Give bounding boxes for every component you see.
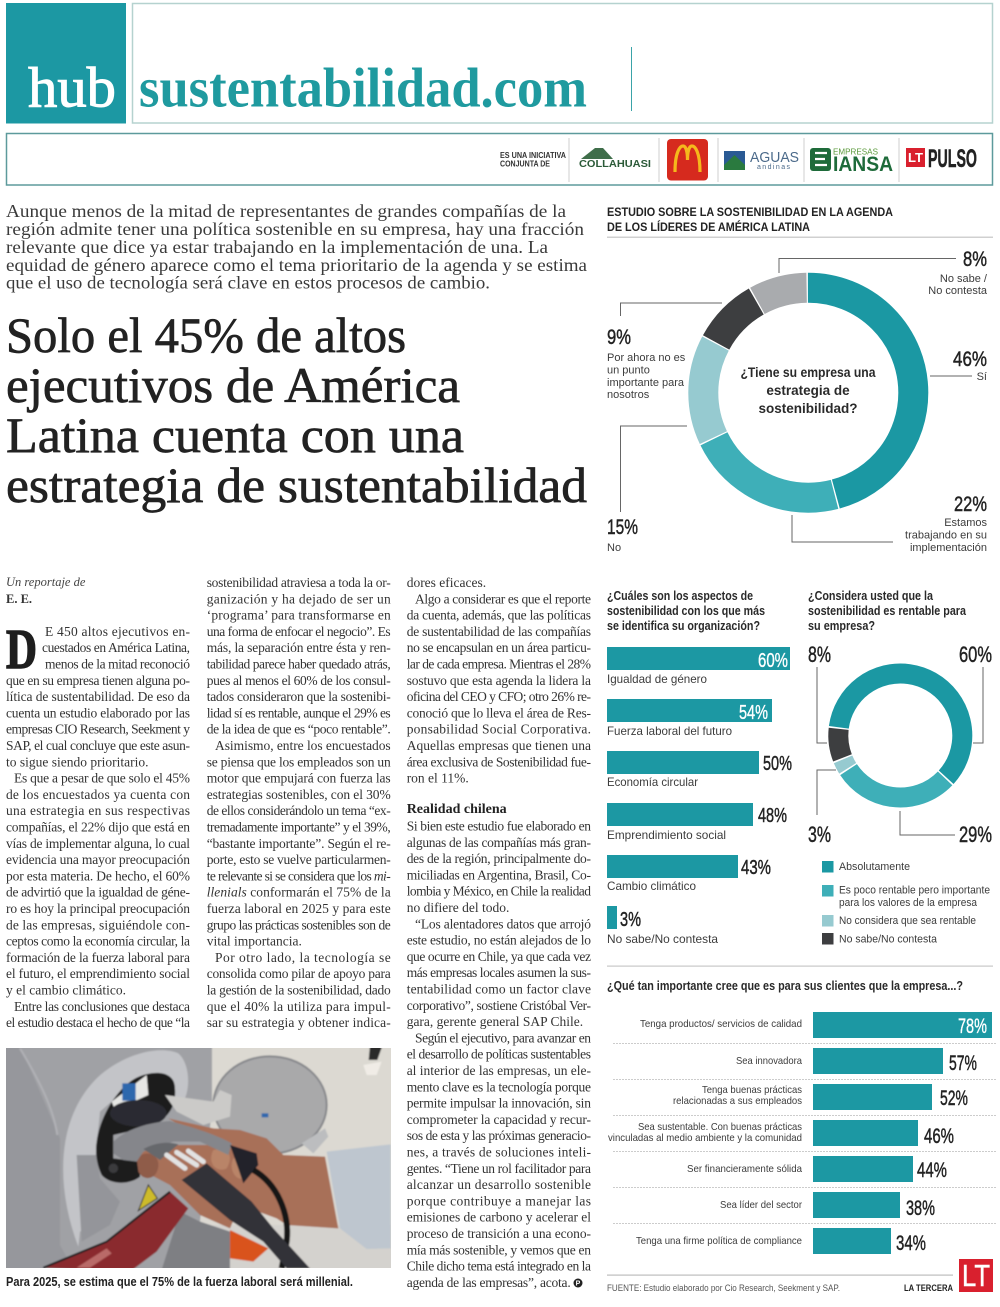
logo: Collahuasi bbox=[579, 148, 651, 170]
legend bbox=[822, 861, 990, 946]
article column 3: conoció que lo lleva el área de Res- bbox=[407, 705, 592, 720]
legend: Es poco rentable pero importante bbox=[839, 884, 990, 896]
hub logo block bbox=[6, 3, 126, 124]
byline: Un reportaje de bbox=[6, 575, 86, 589]
article column 2: lidad sí es rentable, aunque el 29% es bbox=[207, 705, 391, 720]
article column 1: el estudio destaca el hecho de que “la bbox=[6, 1015, 190, 1030]
article column 2: motor que empujará con fuerza las bbox=[207, 771, 391, 786]
bar: No sabe: No sabe/No contesta bbox=[607, 932, 718, 946]
article column 2: ganización y ha dejado de ser un bbox=[207, 591, 391, 606]
site name box: sustentabilidad.com bbox=[139, 58, 587, 120]
article column 2: Por otro lado, la tecnología se bbox=[215, 950, 391, 965]
article column 1: cuenta un estudio elaborado por las bbox=[6, 705, 190, 720]
article column 3 bbox=[407, 575, 592, 1290]
label 8%: 8% bbox=[963, 248, 987, 271]
row 57%: Sea innovadora bbox=[736, 1055, 802, 1067]
question: se identifica su organización? bbox=[607, 619, 760, 633]
donut question: sostenibilidad? bbox=[758, 401, 858, 416]
question bbox=[607, 589, 765, 633]
article column 2 bbox=[207, 575, 391, 1030]
article column 3: gentes. “Tiene un rol facilitador para bbox=[407, 1161, 591, 1176]
bar: Emprendimiento social bbox=[607, 803, 787, 842]
label 22%: 22% bbox=[954, 493, 987, 516]
headline: Solo el 45% de altos bbox=[6, 307, 406, 363]
article column 3: sostuvo que esta agenda la lidera la bbox=[407, 673, 591, 688]
article column 3: proceso de transición a una econo- bbox=[407, 1226, 592, 1241]
photo: electric car charging bbox=[0, 1045, 400, 1275]
article column 3: comprometer la capacidad y recur- bbox=[407, 1112, 592, 1127]
label 3%: 3% bbox=[808, 822, 831, 847]
article column 3: ron el 11%. bbox=[407, 771, 469, 786]
label 46%: 46% bbox=[953, 348, 987, 371]
article column 3: emisiones de carbono y acelerar el bbox=[407, 1210, 591, 1225]
La Tercera logo: LT bbox=[962, 1258, 990, 1293]
label 46% bbox=[930, 348, 987, 383]
article column 3: gara, gerente general SAP Chile. bbox=[407, 1014, 583, 1029]
article column 3: Chile dicho tema está integrado en la bbox=[407, 1259, 591, 1274]
article column 2: grupo las prácticas sostenibles son de bbox=[207, 917, 391, 932]
donut question: estrategia de bbox=[766, 383, 850, 398]
byline: E. E. bbox=[6, 592, 32, 606]
row 34% bbox=[636, 1228, 926, 1255]
article column 1: compañías, el 22% dijo que está en bbox=[6, 820, 190, 834]
article column 2: una forma de enfocar el negocio”. Es bbox=[207, 624, 391, 639]
label 22%: Estamos bbox=[944, 517, 987, 529]
bar: Igualdad de género: Igualdad de género bbox=[607, 672, 707, 686]
label 22%: implementación bbox=[910, 542, 987, 554]
row 44%: 44% bbox=[917, 1159, 947, 1182]
article column 3: porque contribuye a manejar las bbox=[407, 1193, 591, 1208]
photo caption: Para 2025, se estima que el 75% de la fuerza laboral será millenial. bbox=[6, 1275, 353, 1289]
bar: Cambio climático bbox=[607, 855, 771, 893]
row 34%: Tenga una firme política de compliance bbox=[636, 1235, 802, 1247]
donut question: ¿Tiene su empresa una bbox=[740, 365, 876, 380]
bar: Economía circular bbox=[607, 751, 792, 789]
label 22% bbox=[792, 493, 987, 554]
intro paragraph: que el uso de tecnología será clave en estos procesos de cambio. bbox=[6, 272, 490, 292]
bar: Cambio climático: Cambio climático bbox=[607, 879, 696, 893]
row 38%: Sea líder del sector bbox=[720, 1199, 802, 1211]
logo: Aguas Andinas: andinas bbox=[757, 164, 790, 171]
article column 3: mía más sostenible, y vemos que en bbox=[407, 1242, 591, 1257]
bar: Emprendimiento social: Emprendimiento social bbox=[607, 828, 726, 842]
row 78%: 78% bbox=[958, 1015, 987, 1038]
headline: estrategia de sustentabilidad bbox=[6, 457, 587, 513]
article column 2: tados consideraron que la sostenibi- bbox=[207, 689, 391, 704]
label 15%: No bbox=[607, 542, 621, 554]
sponsors strip: ES UNA INICIATIVA bbox=[500, 151, 566, 160]
bar chart: client importance bbox=[607, 979, 997, 1255]
article column 3: este estudio, no están alejados de lo bbox=[407, 933, 591, 948]
article column 1 bbox=[6, 624, 190, 1030]
legend: No considera que sea rentable bbox=[839, 915, 976, 927]
byline bbox=[6, 575, 86, 606]
article column 3: lar de cada empresa. Mientras el 28% bbox=[407, 656, 591, 672]
article column 1: lítica de sustentabilidad. De eso da bbox=[6, 689, 190, 704]
article column 2: estrategias sostenibles, con el 30% bbox=[207, 787, 391, 802]
masthead bbox=[6, 3, 992, 124]
source footer: LA TERCERA bbox=[904, 1283, 953, 1294]
label 15%: 15% bbox=[607, 516, 638, 539]
logo: McDonald's bbox=[667, 139, 708, 180]
article column 3: agenda de las empresas”, acota. bbox=[407, 1275, 571, 1290]
row 52%: Tenga buenas prácticas bbox=[702, 1084, 802, 1096]
label 8%: 8% bbox=[808, 642, 831, 667]
row 46%: vinculadas al medio ambiente y la comunidad bbox=[608, 1132, 802, 1144]
legend: Absolutamente bbox=[839, 861, 910, 873]
article column 3: miciliadas en Argentina, Brasil, Co- bbox=[407, 867, 592, 882]
article column 1: que en su empresa tienen alguna po- bbox=[6, 673, 190, 688]
article column 2: pues al menos el 60% de los consul- bbox=[207, 673, 391, 688]
bar: Emprendimiento social: 48% bbox=[758, 805, 787, 827]
bar: Igualdad de género bbox=[607, 647, 790, 686]
label 15% bbox=[607, 426, 687, 554]
bar: Igualdad de género: 60% bbox=[758, 650, 788, 672]
drop cap: D bbox=[6, 619, 37, 681]
article column 3: algunas de las compañías más gran- bbox=[407, 835, 592, 850]
label 8% bbox=[808, 642, 831, 743]
article column 3: mento clave es la tecnología porque bbox=[407, 1079, 591, 1094]
article column 3: Algo a considerar es que el reporte bbox=[415, 591, 591, 606]
chart heading: ESTUDIO SOBRE LA SOSTENIBILIDAD EN LA AGENDA bbox=[607, 207, 893, 219]
article column 2: que el 40% la utiliza para impul- bbox=[207, 999, 391, 1014]
article column 1: y el cambio climático. bbox=[6, 982, 126, 998]
label 9%: un punto bbox=[607, 364, 650, 376]
article column 2: ‘programa’ para transformarse en bbox=[207, 608, 391, 623]
article column 2: Asimismo, entre los encuestados bbox=[215, 738, 391, 753]
article column 2: consolida como pilar de apoyo para bbox=[207, 966, 391, 981]
article column 3: dores eficaces. bbox=[407, 575, 486, 590]
intro paragraph: región admite tener una política sostenible en su empresa, hay una fracción bbox=[6, 219, 584, 239]
article column 3: no difiere del todo. bbox=[407, 900, 509, 915]
article column 3: al interior de las empresas, un ele- bbox=[407, 1063, 592, 1078]
end mark: P bbox=[576, 1280, 581, 1288]
row 57% bbox=[736, 1048, 977, 1075]
logo: LT Pulso: LT bbox=[908, 150, 923, 165]
article column 3: “Los alentadores datos que arrojó bbox=[415, 916, 591, 931]
bar: Economía circular: 50% bbox=[763, 753, 792, 775]
article column 2: sostenibilidad atraviesa a toda la or- bbox=[207, 575, 391, 590]
article column 3: da cuenta, además, que las políticas bbox=[407, 608, 591, 623]
article column 3: Aquellas empresas que tienen una bbox=[407, 738, 591, 753]
question: sostenibilidad con los que más bbox=[607, 604, 765, 618]
site name box bbox=[132, 4, 992, 123]
article column 2: llenials conformarán el 75% de la bbox=[207, 885, 391, 900]
logo: LT Pulso bbox=[906, 145, 977, 173]
article column 3: ponsabilidad Social Corporativa. bbox=[407, 722, 591, 737]
article column 1: Entre las conclusiones que destaca bbox=[14, 999, 190, 1014]
row 44% bbox=[687, 1156, 947, 1182]
intro paragraph: relevante que dice ya estar trabajando en la implementación de una. La bbox=[6, 237, 548, 257]
row 38%: 38% bbox=[906, 1197, 935, 1220]
end mark bbox=[574, 1278, 582, 1288]
article column 3: lombia y México, en Chile la realidad bbox=[407, 884, 591, 899]
intro paragraph: Aunque menos de la mitad de representantes de grandes compañías de la bbox=[6, 201, 566, 221]
article column 2: porte, esto se vuelve particularmen- bbox=[207, 852, 391, 867]
article column 1: ro es hoy la principal preocupación bbox=[6, 901, 190, 916]
headline bbox=[6, 307, 587, 513]
row 78% bbox=[640, 1012, 992, 1038]
article column 1: una estrategia en sus respectivas bbox=[6, 803, 190, 818]
intro paragraph: equidad de género aparece como el tema prioritario de la agenda y se estima bbox=[6, 255, 587, 275]
article column 2: de la idea de que es “poco rentable”. bbox=[207, 722, 391, 737]
intro paragraph bbox=[6, 201, 587, 292]
article column 3: des de la región, principalmente do- bbox=[407, 851, 592, 866]
donut chart: profitability bbox=[808, 589, 992, 946]
row 57%: 57% bbox=[949, 1052, 977, 1075]
article column 1: por esta materia. De hecho, el 60% bbox=[6, 868, 190, 883]
bar: Economía circular: Economía circular bbox=[607, 775, 698, 789]
article column 1: Es que a pesar de que solo el 45% bbox=[14, 771, 190, 786]
article column 3: que ocurre en Chile, ya que cada vez bbox=[407, 949, 591, 964]
article column 1: cuestados en América Latina, bbox=[42, 640, 190, 655]
hub logo block: hub bbox=[28, 56, 116, 120]
article column 2: vital importancia. bbox=[207, 934, 302, 949]
chart heading: DE LOS LÍDERES DE AMÉRICA LATINA bbox=[607, 221, 810, 234]
article column 1: empresas CIO Research, Seekment y bbox=[6, 722, 190, 737]
article column 3: nes, a través de soluciones inteli- bbox=[407, 1144, 592, 1160]
logo: Empresas Iansa: IANSA bbox=[833, 153, 893, 176]
question bbox=[808, 589, 967, 633]
row 44%: Ser financieramente sólida bbox=[687, 1163, 802, 1175]
row 52%: 52% bbox=[940, 1087, 968, 1110]
label 8% bbox=[779, 248, 988, 297]
article column 2: tremadamente importante” y el 39%, bbox=[207, 820, 391, 834]
label 9%: importante para bbox=[607, 377, 685, 389]
question: sostenibilidad es rentable para bbox=[808, 604, 967, 618]
headline: ejecutivos de América bbox=[6, 357, 460, 413]
article column 3: tentabilidad como un factor clave bbox=[407, 982, 591, 996]
article column 3: Si bien este estudio fue elaborado en bbox=[407, 818, 591, 834]
sponsors strip: CONJUNTA DE bbox=[500, 160, 551, 168]
article column 1: evidencia una mayor preocupación bbox=[6, 852, 190, 867]
bar: No sabe bbox=[607, 906, 718, 946]
label 9% bbox=[607, 303, 722, 401]
label 3% bbox=[808, 770, 836, 847]
row 52%: relacionadas a sus empleados bbox=[673, 1095, 802, 1107]
question: ¿Considera usted que la bbox=[808, 589, 934, 603]
article column 3: oficina del CEO y CFO; otro 26% re- bbox=[407, 689, 592, 704]
bar: Cambio climático: 43% bbox=[741, 857, 771, 879]
bar chart: aspects bbox=[607, 589, 792, 946]
article column 1: el futuro, el emprendimiento social bbox=[6, 966, 190, 981]
logo: Aguas Andinas: AGUAS bbox=[750, 149, 799, 166]
bar: Fuerza laboral bbox=[607, 699, 772, 738]
row 46%: 46% bbox=[924, 1125, 954, 1148]
article column 2: más, la separación entre ésta y ren- bbox=[207, 640, 391, 655]
article column 3: alcanzar un desarrollo sostenible bbox=[407, 1177, 591, 1192]
article column 1: vías de implementar alguna, lo cual bbox=[6, 836, 190, 851]
article column 3: no se encapsulan en un área particu- bbox=[407, 640, 592, 655]
source footer: FUENTE: Estudio elaborado por Cio Research, Seekment y SAP. bbox=[607, 1283, 840, 1294]
article column 2: tabilidad parece haber quedado atrás, bbox=[207, 656, 391, 672]
article column 2: de ellos considerándolo un tema “ex- bbox=[207, 803, 391, 818]
label 60% bbox=[959, 642, 992, 743]
article column 1: de las empresas, siguiéndole con- bbox=[6, 917, 190, 932]
question: su empresa? bbox=[808, 619, 875, 633]
article column 3: el desarrollo de políticas sustentables bbox=[407, 1047, 591, 1062]
row 34%: 34% bbox=[896, 1232, 926, 1255]
label 9%: nosotros bbox=[607, 389, 650, 401]
article column 2: te relevante si se considera que los mi- bbox=[207, 868, 391, 883]
article column 1: to sigue siendo prioritario. bbox=[6, 754, 148, 769]
sponsors strip bbox=[6, 134, 992, 185]
article column 3: corporativo”, sostiene Cristóbal Ver- bbox=[407, 998, 592, 1013]
article column 3: sos de esta y las próximas generacio- bbox=[407, 1128, 592, 1143]
label 22%: trabajando en su bbox=[905, 530, 987, 542]
article column 1: SAP, el cual concluye que este asun- bbox=[6, 738, 190, 753]
label 29% bbox=[900, 811, 992, 847]
row 38% bbox=[720, 1192, 935, 1220]
bar: Fuerza laboral: Fuerza laboral del futuro bbox=[607, 724, 732, 738]
bar: No sabe: 3% bbox=[620, 909, 641, 931]
logo: Empresas Iansa: EMPRESAS bbox=[833, 146, 878, 156]
legend: No sabe/No contesta bbox=[839, 934, 938, 946]
bar: Fuerza laboral: 54% bbox=[739, 702, 768, 724]
article column 3: más empresas locales asumen la sus- bbox=[407, 965, 592, 980]
chart heading bbox=[607, 207, 993, 238]
article column 3: permite impulsar la innovación, sin bbox=[407, 1096, 591, 1111]
question: ¿Cuáles son los aspectos de bbox=[607, 589, 753, 603]
row 46%: Sea sustentable. Con buenas prácticas bbox=[638, 1121, 802, 1133]
article column 1: de los encuestados ya cuenta con bbox=[6, 787, 190, 802]
article column 1: de advirtió que la igualdad de géne- bbox=[6, 885, 190, 900]
article column 1: formación de la fuerza laboral para bbox=[6, 950, 190, 965]
donut question bbox=[740, 365, 876, 416]
logo: Collahuasi: COLLAHUASI bbox=[579, 158, 651, 170]
article column 1: ceptos como la economía circular, la bbox=[6, 934, 190, 949]
headline: Latina cuenta con una bbox=[6, 407, 464, 463]
label 9%: Por ahora no es bbox=[607, 352, 686, 364]
article column 2: sar su estrategia y obtener indica- bbox=[207, 1015, 391, 1030]
label 8%: No sabe / bbox=[940, 273, 988, 285]
article column 3: de sustentabilidad de las compañías bbox=[407, 624, 591, 639]
logo: Empresas Iansa bbox=[810, 146, 893, 176]
source footer bbox=[607, 1258, 993, 1294]
article column 2: la gestión de la sostenibilidad, dado bbox=[207, 982, 391, 998]
row 52% bbox=[673, 1084, 968, 1110]
legend: para los valores de la empresa bbox=[839, 897, 978, 909]
article column 3: Según el ejecutivo, para avanzar en bbox=[415, 1030, 591, 1045]
label 8%: No contesta bbox=[928, 285, 988, 297]
article column 1: menos de la mitad reconoció bbox=[45, 656, 190, 672]
label 46%: Sí bbox=[977, 371, 987, 383]
row 46% bbox=[608, 1120, 954, 1148]
article column 2: se piensa que los empleados son un bbox=[207, 754, 391, 769]
donut chart: strategy bbox=[607, 248, 988, 554]
row 78%: Tenga productos/ servicios de calidad bbox=[640, 1018, 802, 1030]
subheading: Realidad chilena bbox=[407, 802, 507, 817]
article column 2: fuerza laboral en 2025 y para este bbox=[207, 901, 391, 916]
article column 1: E 450 altos ejecutivos en- bbox=[45, 624, 190, 639]
article column 3: área exclusiva de Sostenibilidad fue- bbox=[407, 754, 592, 769]
label 9%: 9% bbox=[607, 326, 631, 349]
article column 2: “bastante importante”. Según el re- bbox=[207, 836, 391, 851]
logo: Aguas Andinas bbox=[724, 149, 799, 171]
